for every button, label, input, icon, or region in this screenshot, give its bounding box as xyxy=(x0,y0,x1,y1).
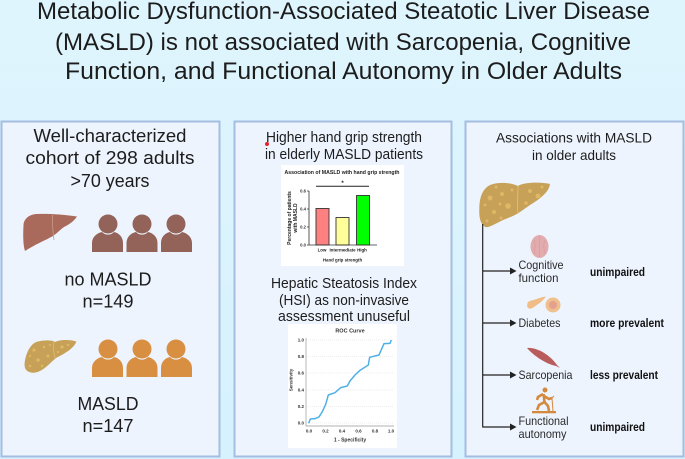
chart: ROC curve: 0.4 xyxy=(339,428,346,434)
panel: findings xyxy=(234,122,452,456)
chart: ROC curve: Sensitivity xyxy=(288,368,294,391)
chart: ROC curve: 1.0 xyxy=(298,338,304,343)
associations heading xyxy=(496,130,652,163)
bar chart: grip strength: Intermediate xyxy=(329,248,356,252)
chart: ROC curve: ROC Curve xyxy=(335,328,365,334)
bar chart: grip strength: 0.0 xyxy=(300,242,307,248)
icon: treadmill runner xyxy=(532,388,556,413)
functional autonomy label xyxy=(518,414,568,441)
title: (MASLD) is not associated with Sarcopenia, Cognitive xyxy=(55,29,631,56)
cohort heading xyxy=(26,126,194,191)
functional autonomy label: autonomy xyxy=(518,427,566,441)
chart: ROC curve: 0.0 xyxy=(306,428,313,434)
associations heading: in older adults xyxy=(532,147,616,163)
icon: brain xyxy=(530,235,548,258)
icon: people no MASLD xyxy=(92,214,192,252)
HSI heading: Hepatic Steatosis Index xyxy=(271,276,418,292)
cohort heading: Well-characterized xyxy=(34,126,186,146)
grip heading: Higher hand grip strength xyxy=(266,130,422,146)
icon: people MASLD xyxy=(92,340,192,377)
cohort heading: cohort of 298 adults xyxy=(26,148,194,168)
less prevalent: less prevalent xyxy=(590,370,658,382)
panel: cohort xyxy=(2,122,220,456)
chart: ROC curve: 1 - Specificity xyxy=(334,438,366,444)
functional autonomy label: Functional xyxy=(518,414,568,428)
MASLD label: n=147 xyxy=(82,416,134,436)
icon: fatty liver large xyxy=(479,183,550,227)
bar chart: grip strength: Association of MASLD with hand grip strength xyxy=(284,170,400,176)
chart: ROC curve: 0.2 xyxy=(298,404,304,409)
bar chart: grip strength: Percentage of patients xyxy=(287,191,293,245)
bar chart: grip strength: 0.4 xyxy=(300,206,307,212)
chart: ROC curve: 0.8 xyxy=(298,354,304,359)
icon: muscle xyxy=(527,348,560,368)
connector arrows xyxy=(483,224,516,430)
chart: ROC curve: 0.4 xyxy=(298,388,304,393)
chart: ROC curve: 0.8 xyxy=(372,428,379,434)
panel: associations xyxy=(466,122,684,456)
bar chart: grip strength: High xyxy=(357,248,367,252)
chart: ROC curve: 0.6 xyxy=(355,428,362,434)
bar chart: grip strength: Low xyxy=(318,248,327,252)
more prevalent: more prevalent xyxy=(590,318,664,330)
bar chart: grip strength xyxy=(281,165,404,266)
chart: ROC curve: 1.0 xyxy=(388,428,395,434)
HSI heading: assessment unuseful xyxy=(278,309,410,325)
MASLD label xyxy=(78,394,139,436)
chart: ROC curve xyxy=(288,324,397,448)
cohort heading: >70 years xyxy=(70,171,150,191)
diabetes label: Diabetes xyxy=(518,316,560,330)
sarcopenia label: Sarcopenia xyxy=(518,368,573,382)
title: Function, and Functional Autonomy in Older Adults xyxy=(65,58,622,85)
cognitive function label: Cognitive xyxy=(518,258,564,272)
bar chart: grip strength: 0.6 xyxy=(300,188,307,194)
bar chart: grip strength: with MASLD xyxy=(293,203,299,234)
HSI heading: (HSI) as non-invasive xyxy=(279,293,409,309)
HSI heading xyxy=(271,276,418,325)
MASLD label: MASLD xyxy=(78,394,139,414)
no MASLD label: n=149 xyxy=(82,292,134,312)
cognitive function label xyxy=(518,258,564,285)
title xyxy=(37,0,650,85)
cognitive function label: function xyxy=(518,271,558,285)
bar chart: grip strength: * xyxy=(341,181,344,187)
chart: ROC curve: 0.2 xyxy=(322,428,329,434)
unimpaired cognitive: unimpaired xyxy=(590,267,645,279)
associations heading: Associations with MASLD xyxy=(496,130,652,146)
chart: ROC curve: 0.6 xyxy=(298,371,304,376)
icon: healthy liver xyxy=(23,214,77,251)
grip heading: in elderly MASLD patients xyxy=(265,147,423,163)
grip heading xyxy=(265,130,423,163)
chart: ROC curve: 0.0 xyxy=(298,421,304,426)
bar chart: grip strength: 0.2 xyxy=(300,224,307,230)
red dot xyxy=(265,142,269,146)
unimpaired autonomy: unimpaired xyxy=(590,422,645,434)
icon: fatty liver xyxy=(24,340,76,373)
no MASLD label xyxy=(64,270,152,312)
no MASLD label: no MASLD xyxy=(64,270,152,290)
bar chart: grip strength: Hand grip strength xyxy=(323,258,362,262)
icon: pancreas xyxy=(527,296,560,312)
